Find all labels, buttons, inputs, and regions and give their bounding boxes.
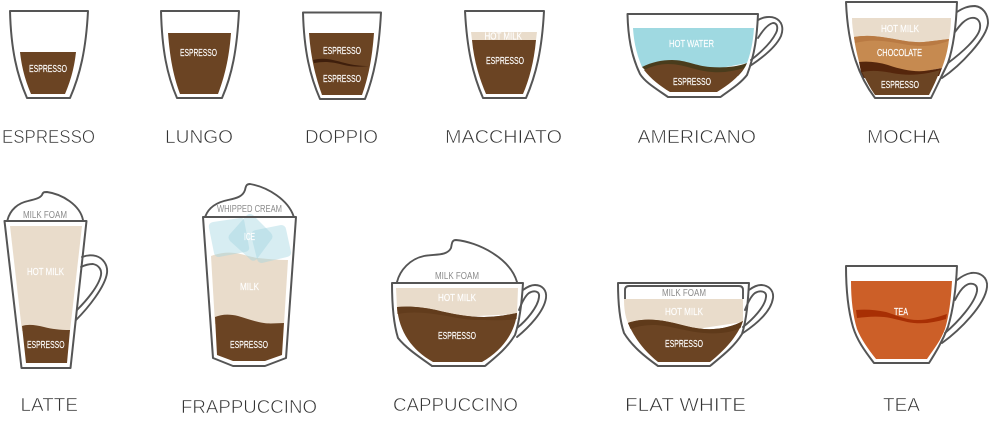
layer labels xyxy=(484,30,524,67)
layer labels xyxy=(23,209,67,351)
ice cubes xyxy=(209,214,291,263)
layer labels xyxy=(669,38,714,88)
hot milk layer xyxy=(852,18,951,46)
milk foam outline xyxy=(8,192,83,220)
glass outline xyxy=(465,11,544,98)
layer labels: WHIPPED CREAM xyxy=(217,203,282,215)
layer labels: HOT MILK xyxy=(665,306,703,318)
layer labels xyxy=(435,270,479,342)
milk layer xyxy=(211,253,288,324)
name: FRAPPUCCINO xyxy=(181,397,317,417)
layer labels: MILK xyxy=(240,281,259,293)
drink: americano xyxy=(628,14,782,147)
drink: flat white xyxy=(618,283,773,415)
layer labels: ESPRESSO xyxy=(27,339,64,351)
espresso layer xyxy=(862,70,940,95)
chocolate layer xyxy=(854,36,949,76)
seam between shots xyxy=(313,59,369,67)
layer labels: MILK FOAM xyxy=(23,209,67,221)
espresso fill xyxy=(168,33,231,94)
cup outline xyxy=(618,283,749,366)
espresso layer xyxy=(397,307,517,362)
drink: frappuccino xyxy=(181,184,317,417)
espresso fill xyxy=(309,33,374,95)
espresso shade xyxy=(397,307,517,320)
hot milk layer xyxy=(396,288,518,318)
layer labels xyxy=(323,45,361,85)
layer labels: HOT MILK xyxy=(438,292,476,304)
layer labels: ESPRESSO xyxy=(438,330,476,342)
name: LUNGO xyxy=(165,127,233,147)
cup outline xyxy=(846,2,957,98)
hot water layer xyxy=(633,28,754,72)
espresso layer xyxy=(628,320,743,362)
hot milk layer xyxy=(624,299,743,330)
cup outline xyxy=(628,14,758,97)
layer labels: ESPRESSO xyxy=(323,73,361,85)
drink: macchiato xyxy=(445,11,562,147)
layer labels: ESPRESSO xyxy=(230,339,268,351)
layer labels: HOT MILK xyxy=(484,30,522,42)
glass outline xyxy=(4,221,86,368)
whipped cream outline xyxy=(206,184,294,216)
drink: doppio xyxy=(303,12,381,147)
name: ESPRESSO xyxy=(2,127,95,147)
layer labels: MILK FOAM xyxy=(435,270,479,282)
name: MOCHA xyxy=(867,127,940,147)
name: TEA xyxy=(883,395,920,415)
name: FLAT WHITE xyxy=(625,395,746,415)
handle xyxy=(743,285,773,333)
layer label: ESPRESSO xyxy=(180,47,217,59)
layer labels: ICE xyxy=(244,231,255,243)
hot milk layer xyxy=(10,226,82,331)
layer labels xyxy=(217,203,282,351)
layer labels xyxy=(662,287,706,350)
drink: cappuccino xyxy=(392,240,546,415)
handle xyxy=(517,285,546,337)
name: DOPPIO xyxy=(305,127,378,147)
espresso shade xyxy=(628,320,743,333)
dark chocolate wave xyxy=(859,62,942,78)
layer labels: ESPRESSO xyxy=(323,45,361,57)
layer labels: ESPRESSO xyxy=(665,338,703,350)
glass outline xyxy=(161,11,239,98)
name: MACCHIATO xyxy=(445,127,562,147)
name: CAPPUCCINO xyxy=(393,395,518,415)
name: AMERICANO xyxy=(638,127,756,147)
drink: lungo xyxy=(161,11,239,147)
chocolate shade xyxy=(854,36,949,46)
milk foam outline xyxy=(397,240,517,282)
cup outline xyxy=(392,283,523,366)
drink: mocha xyxy=(846,2,988,147)
layer label: ESPRESSO xyxy=(29,63,67,75)
name: LATTE xyxy=(20,395,78,415)
drink: espresso xyxy=(2,11,95,147)
drink: tea xyxy=(846,266,987,415)
layer labels: HOT MILK xyxy=(27,266,64,278)
glass outline xyxy=(303,12,381,99)
espresso fill xyxy=(20,52,76,94)
handle xyxy=(942,273,987,343)
espresso fill xyxy=(472,40,536,94)
layer labels: CHOCOLATE xyxy=(877,47,922,59)
espresso layer xyxy=(215,315,284,361)
dark wave band xyxy=(642,60,747,80)
glass outline xyxy=(10,11,88,98)
dark tea wave xyxy=(856,310,947,323)
milk foam outline xyxy=(625,286,743,299)
glass outline xyxy=(203,217,296,366)
layer labels: ESPRESSO xyxy=(673,76,711,88)
handle xyxy=(942,6,988,78)
drink: latte xyxy=(4,192,107,415)
layer labels: MILK FOAM xyxy=(662,287,706,299)
handle xyxy=(76,255,107,320)
espresso layer xyxy=(22,325,70,363)
layer labels: HOT MILK xyxy=(881,23,919,35)
layer labels: ESPRESSO xyxy=(881,79,919,91)
layer labels xyxy=(877,23,922,91)
layer label: TEA xyxy=(894,306,908,318)
cup outline xyxy=(846,266,957,363)
layer labels: ESPRESSO xyxy=(486,55,524,67)
layer labels: HOT WATER xyxy=(669,38,714,50)
hot milk layer xyxy=(471,32,537,40)
espresso layer xyxy=(644,64,744,92)
handle xyxy=(750,17,782,66)
tea fill xyxy=(851,281,952,359)
